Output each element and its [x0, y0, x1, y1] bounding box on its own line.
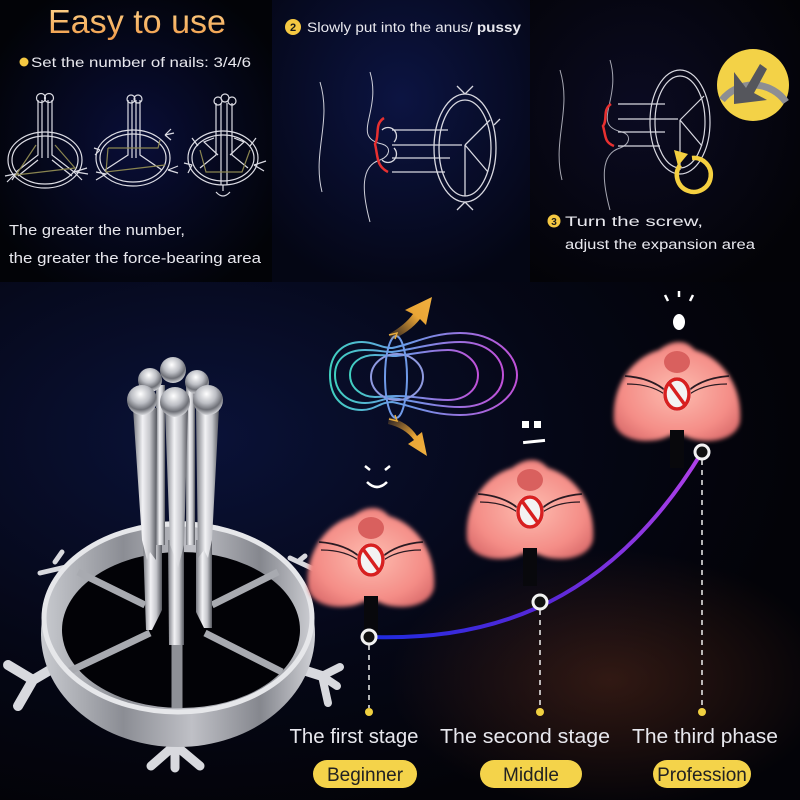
- badge: Profession: Profession: [657, 765, 747, 786]
- dashed guides: [369, 460, 702, 708]
- warm glow: [390, 550, 800, 800]
- ring opening: [62, 552, 300, 708]
- stage 2 illustration: [467, 421, 593, 586]
- detail: yellow circle with screw: [717, 49, 789, 121]
- device diagram side view: [382, 86, 500, 210]
- stage labels: The third phase: [632, 726, 778, 748]
- badge: Profession: [653, 760, 751, 788]
- badge: Middle: [480, 760, 582, 788]
- diagram: 6 nails: [184, 94, 266, 196]
- arrow down: [388, 417, 427, 456]
- step 2 label: 2: [290, 22, 296, 34]
- badge: Beginner: [313, 760, 417, 788]
- face: neutral: [522, 421, 545, 444]
- product photo: metal ring device: [8, 357, 340, 768]
- caption: force-bearing area: The greater the number,: [9, 223, 185, 239]
- small arrow tips: [389, 333, 397, 421]
- figure outline: [319, 72, 389, 222]
- red highlight: [603, 104, 614, 146]
- ring rim: [44, 524, 312, 712]
- arrow up: [389, 297, 432, 340]
- face: surprised: [665, 291, 693, 330]
- caption: force-bearing area: the greater the force-bearing area: [9, 251, 262, 267]
- wing nuts: [8, 552, 340, 768]
- rotation arrow: [674, 150, 711, 192]
- title: Easy to use: Easy to use: [48, 3, 226, 40]
- rear prongs: [156, 385, 195, 545]
- diagram: 3 nails: [5, 94, 88, 188]
- baseline dots: [365, 708, 706, 716]
- lower legs: [143, 540, 212, 645]
- panel: adjust step: [530, 0, 800, 282]
- panel: bottom background: [0, 282, 800, 800]
- stage labels: The second stage: [440, 726, 610, 748]
- ring band: [41, 521, 315, 747]
- spokes: [68, 572, 282, 708]
- device diagram side view: [618, 70, 710, 174]
- figure outline: [559, 60, 629, 210]
- prong heads: [127, 357, 223, 417]
- progression curve: [362, 445, 709, 716]
- step 3 label: [548, 214, 756, 252]
- front prongs: [133, 408, 219, 568]
- step 3 label: adjust the expansion area: [565, 237, 756, 252]
- badge: Middle: Middle: [503, 765, 559, 786]
- stage 1 illustration: [308, 466, 434, 634]
- step 2 label: Slowly put into the anus/ pussy: [307, 20, 522, 35]
- step 3 label: Turn the screw,: [565, 214, 703, 229]
- step 3 label: 3: [551, 217, 557, 228]
- red highlight: [375, 118, 388, 172]
- badge: Beginner: Beginner: [327, 765, 404, 786]
- coloured outline rings: [330, 333, 517, 415]
- stage 3 illustration: [614, 291, 740, 468]
- curve markers: [362, 445, 709, 644]
- panel: number of nails: [0, 0, 272, 282]
- step 1 label: Set the number of nails: 3/4/6: [31, 54, 251, 70]
- centre shape: [371, 354, 423, 400]
- face: smile: [365, 466, 390, 487]
- diagram: 4 nails: [94, 95, 178, 186]
- expansion diagram: [330, 297, 517, 456]
- caption: force-bearing area: [9, 223, 262, 267]
- panel: insertion step: [272, 0, 530, 282]
- stage labels: [290, 726, 778, 748]
- stage labels: The first stage: [290, 726, 418, 748]
